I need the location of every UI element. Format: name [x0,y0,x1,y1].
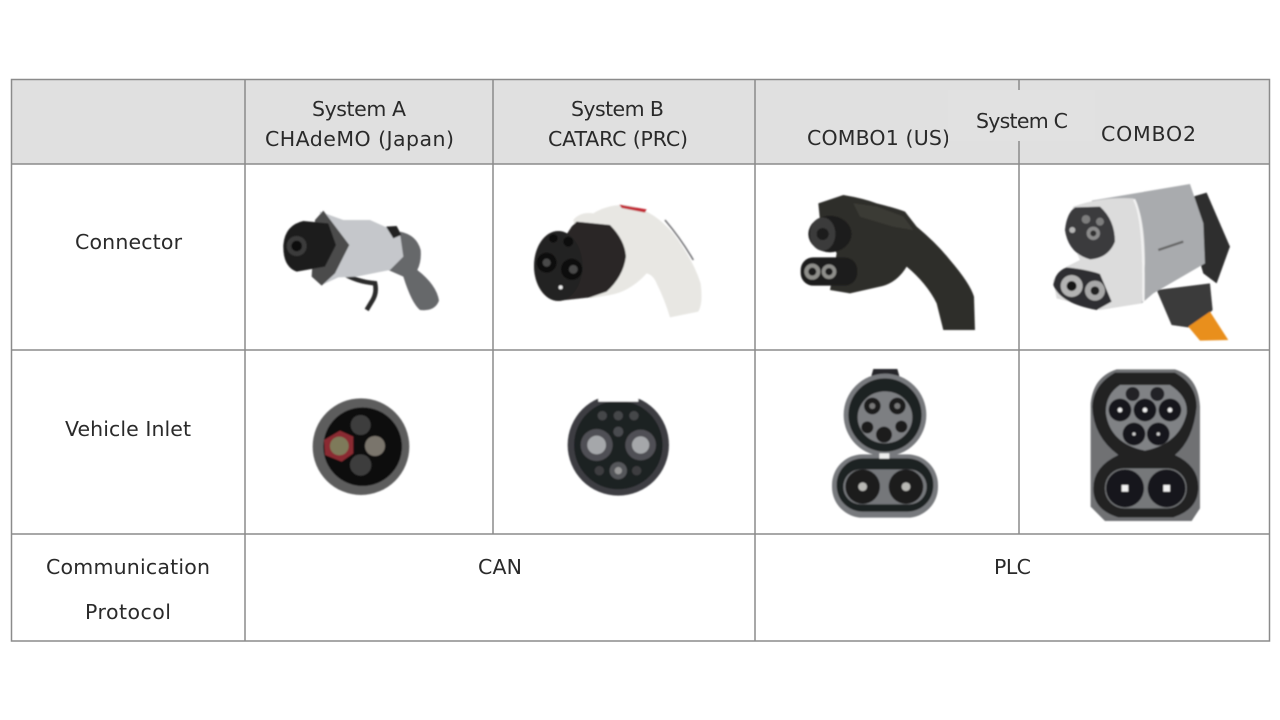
table header background [11,79,1270,164]
icon: CATARC connector [534,205,702,317]
row label: Communication Protocol: Protocol [85,600,171,624]
row label: Vehicle Inlet: Vehicle Inlet [65,417,191,441]
icon: COMBO1 connector [801,195,975,330]
icon: COMBO1 inlet [832,369,938,518]
table grid [11,79,1270,641]
header: System A: CHAdeMO (Japan) [265,127,454,151]
protocol: PLC: PLC [994,555,1031,579]
row label: Connector: Connector [75,230,183,254]
header: System A: System A [312,97,406,121]
header: System B: CATARC (PRC) [548,127,688,151]
icon: COMBO2 inlet [1091,369,1200,521]
header: System B: System B [571,97,664,121]
icon: CHAdeMO inlet [313,398,409,495]
icon: COMBO2 connector [1053,184,1230,341]
protocol: CAN: CAN [478,555,522,579]
header: COMBO2: COMBO2 [1101,122,1196,146]
header: System C: System C [976,109,1068,133]
row label: Communication Protocol [46,555,210,624]
header: System B [548,97,688,151]
header: System A [265,97,454,151]
icon: CATARC inlet [568,393,669,496]
icon: CHAdeMO connector [283,211,439,310]
row label: Communication Protocol: Communication [46,555,210,579]
header: COMBO1: COMBO1 (US) [807,126,950,150]
